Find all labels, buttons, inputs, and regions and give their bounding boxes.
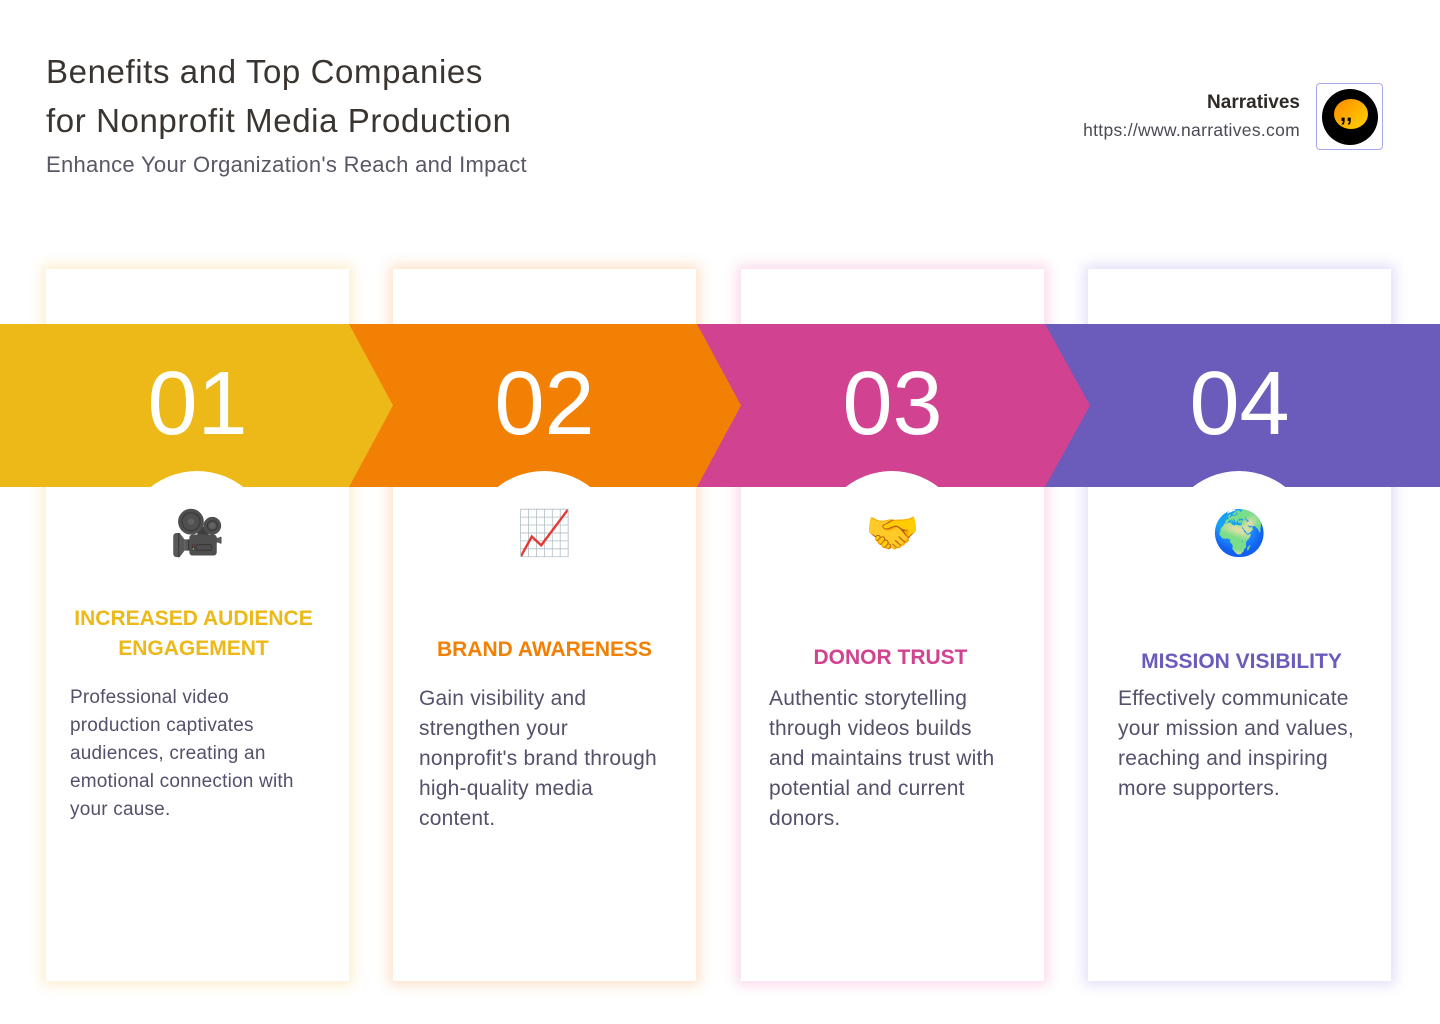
card 1 (46, 269, 349, 981)
brand url: https://www.narratives.com (1083, 120, 1300, 140)
text: 04 (1189, 354, 1290, 454)
heading 1: ENGAGEMENT (118, 637, 269, 660)
banner arrows (0, 324, 1440, 487)
heading 2: BRAND AWARENESS (437, 638, 652, 661)
text: 02 (494, 354, 595, 454)
heading 1 (74, 607, 313, 660)
icon: camera: 🎥 (170, 507, 225, 559)
heading 4: MISSION VISIBILITY (1141, 650, 1342, 673)
card 2 (393, 269, 696, 981)
text 4: Effectively communicate your mission and values, reaching and inspiring more supporters. (1118, 687, 1354, 800)
title: Benefits and Top Companies (46, 53, 483, 90)
text: 03 (842, 354, 943, 454)
brand name: Narratives (1207, 92, 1300, 113)
icon: handshake: 🤝 (865, 507, 920, 559)
icon: chart: 📈 (517, 507, 572, 559)
numbers: 01 (147, 354, 248, 454)
icon: logo: ,, (1340, 101, 1352, 126)
brand block (1083, 83, 1383, 150)
text 2: Gain visibility and strengthen your nonprofit's brand through high-quality media content. (419, 687, 657, 830)
white cover below banner (46, 487, 349, 981)
text 1: Professional video production captivates audiences, creating an emotional connection with your cause. (70, 687, 294, 820)
title: for Nonprofit Media Production (46, 102, 512, 139)
card 3 (741, 269, 1044, 981)
text 3: Authentic storytelling through videos builds and maintains trust with potential and current donors. (769, 687, 994, 830)
title (46, 53, 512, 139)
card 4 (1088, 269, 1391, 981)
heading 3: DONOR TRUST (814, 646, 968, 669)
icon circles (122, 471, 272, 621)
heading 1: INCREASED AUDIENCE (74, 607, 313, 630)
subtitle: Enhance Your Organization's Reach and Impact (46, 152, 527, 177)
icon: globe: 🌍 (1212, 507, 1267, 559)
icon: logo (1316, 83, 1383, 150)
